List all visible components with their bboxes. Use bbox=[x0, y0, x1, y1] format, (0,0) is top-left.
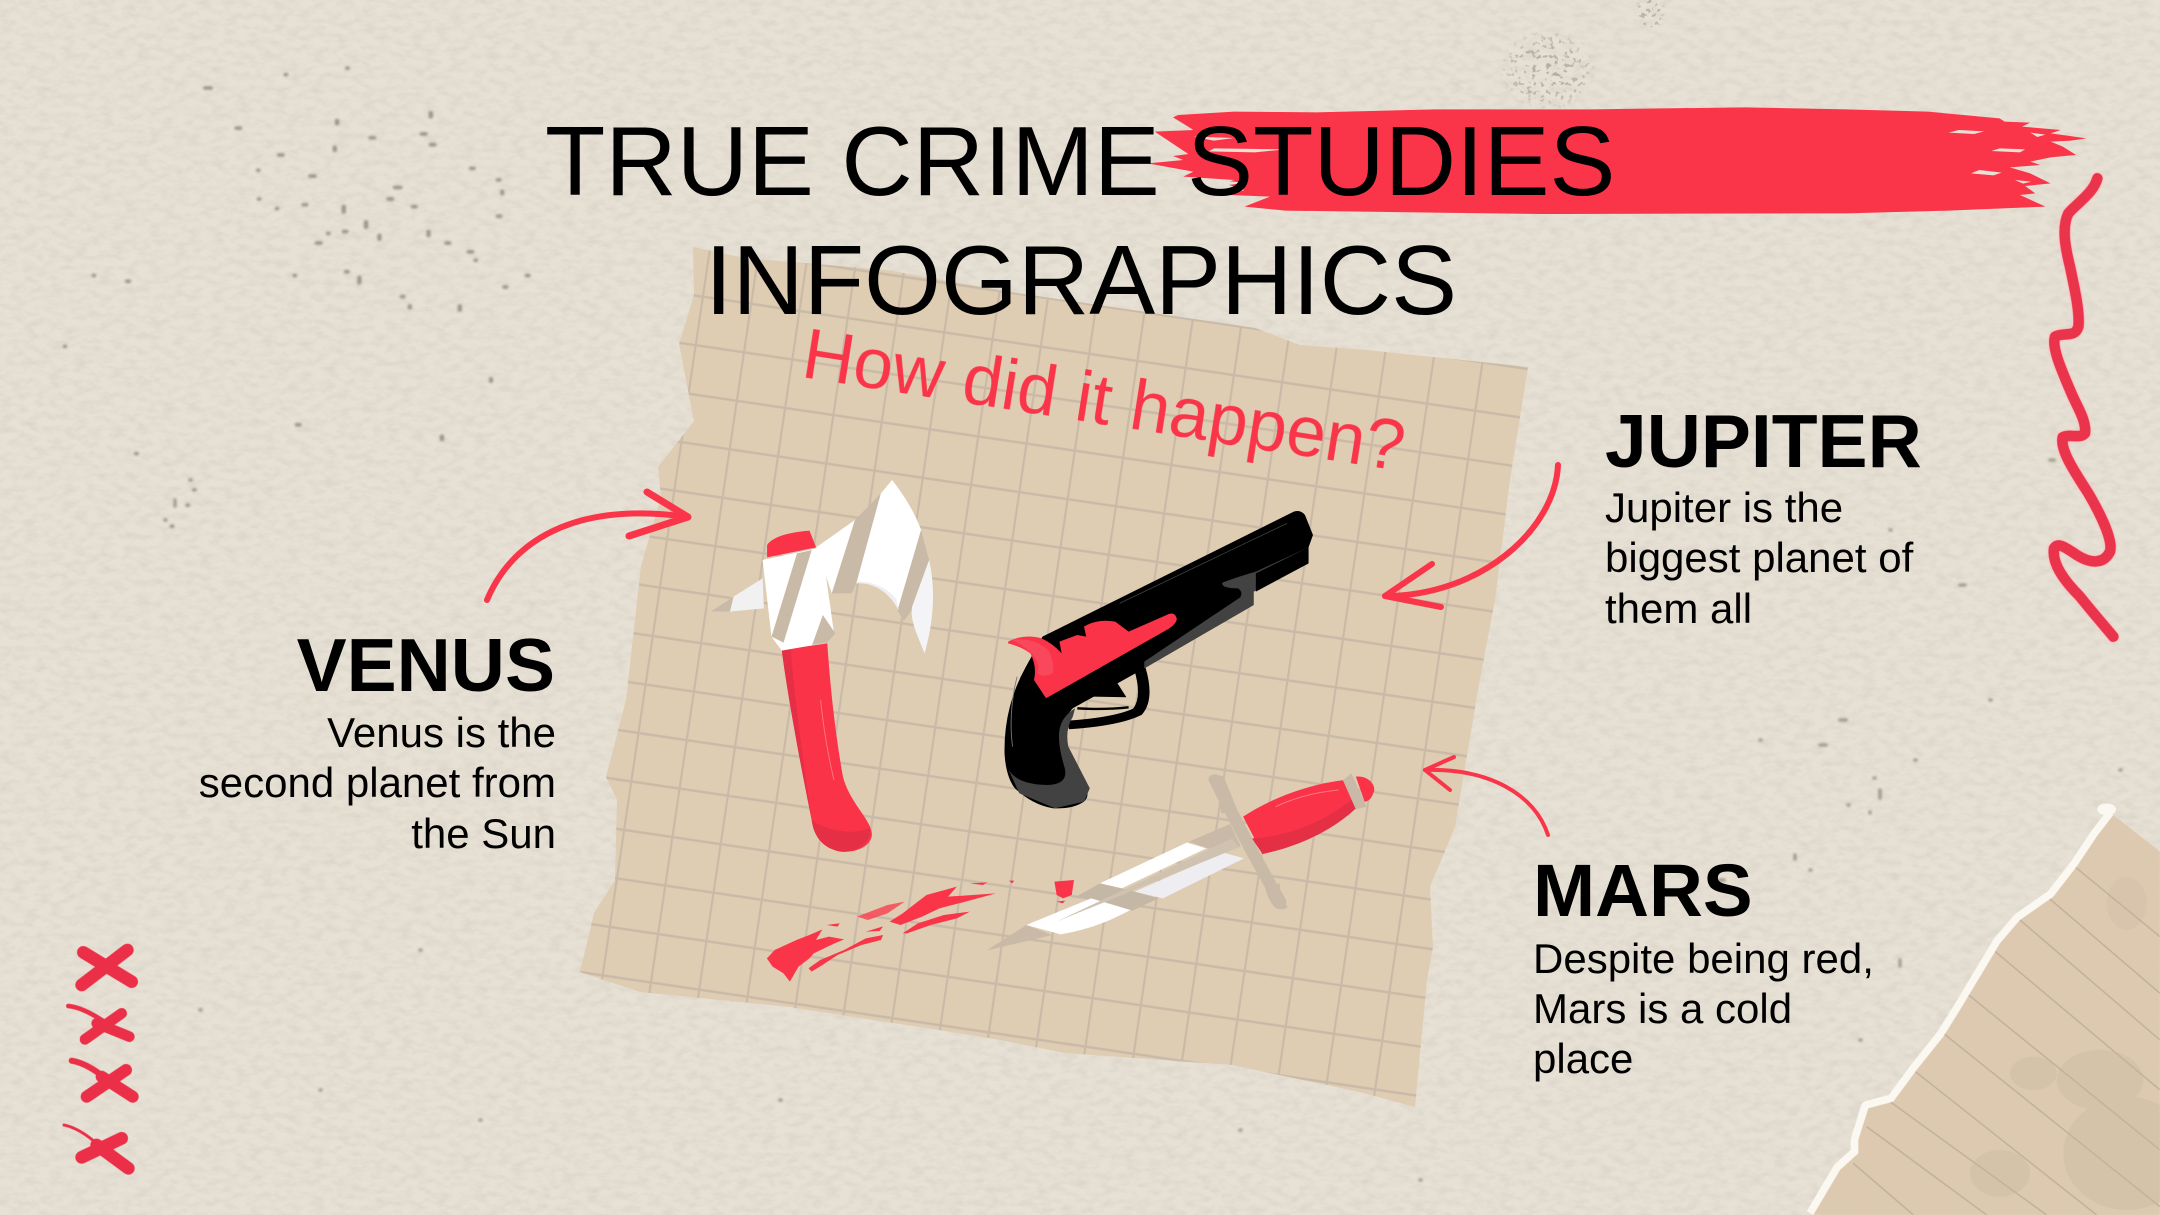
arrow to pistol bbox=[1385, 465, 1558, 607]
text block: Venus bbox=[199, 623, 556, 857]
torn graph paper sheet bbox=[560, 230, 1540, 1120]
icon: dagger bbox=[986, 773, 1374, 951]
text block: Mars: MARS bbox=[1533, 848, 1753, 932]
red cross marks bbox=[64, 950, 133, 1168]
title: TRUE CRIME STUDIES bbox=[545, 106, 1615, 216]
text block: Jupiter: Jupiter is the bbox=[1605, 484, 1843, 531]
red brush stroke behind title bbox=[1148, 107, 2086, 214]
blood splatter bbox=[767, 880, 1074, 982]
text block: Mars: place bbox=[1533, 1035, 1633, 1082]
text block: Jupiter: them all bbox=[1605, 585, 1752, 632]
text block: Jupiter bbox=[1605, 399, 1922, 632]
text block: Mars bbox=[1533, 848, 1874, 1082]
icon: flintlock pistol bbox=[1004, 511, 1313, 808]
arrow to Venus icon bbox=[487, 492, 688, 600]
text block: Venus: second planet from bbox=[199, 759, 556, 806]
text block: Jupiter: biggest planet of bbox=[1605, 534, 1914, 581]
text block: Venus: Venus is the bbox=[327, 709, 556, 756]
text block: Mars: Mars is a cold bbox=[1533, 985, 1792, 1032]
text block: Mars: Despite being red, bbox=[1533, 935, 1874, 982]
red scribble line bbox=[2054, 178, 2113, 637]
icon: axe bbox=[710, 480, 933, 852]
title: INFOGRAPHICS bbox=[705, 225, 1457, 335]
text block: Jupiter: JUPITER bbox=[1605, 399, 1922, 483]
torn lined paper corner bbox=[1780, 803, 2160, 1215]
arrow to dagger bbox=[1425, 757, 1548, 835]
text block: Venus: the Sun bbox=[411, 810, 556, 857]
text block: Venus: VENUS bbox=[297, 623, 555, 707]
title bbox=[545, 106, 1615, 335]
subtitle: how did it happen: How did it happen? bbox=[798, 315, 1410, 487]
